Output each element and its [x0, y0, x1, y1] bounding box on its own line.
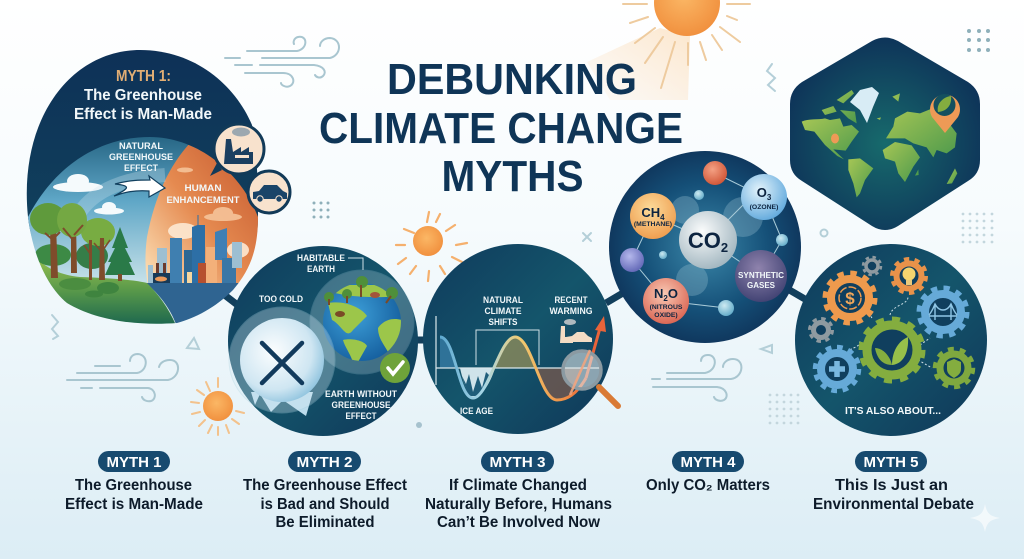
- warming arrow: [586, 328, 600, 378]
- icon: small gray gear top: [863, 257, 881, 275]
- icon: dollar gear: [825, 273, 875, 323]
- title: MYTHS: [442, 152, 584, 201]
- natural sky: [28, 137, 200, 323]
- icon: small pin: [831, 134, 839, 144]
- label: myth 4: [646, 451, 770, 494]
- map: greenland: [850, 87, 879, 123]
- molecule: CO2: [679, 211, 737, 269]
- molecule: small spheres: [620, 161, 788, 316]
- label: myth 1: The Greenhouse: [75, 477, 192, 494]
- chart fills: [440, 337, 455, 368]
- icon: sun at top: [587, 0, 750, 100]
- text: habitable earth: [297, 253, 345, 275]
- icon: habitable earth globe: [310, 270, 414, 374]
- icon: lightbulb gear: [892, 259, 926, 293]
- icon: small dot: [416, 422, 422, 428]
- label: myth 3: MYTH 3: [490, 455, 546, 471]
- text: natural greenhouse effect: GREENHOUSE: [109, 152, 173, 163]
- text: natural climate shifts: [483, 295, 523, 328]
- trees: [30, 203, 135, 298]
- label: myth 5: Environmental Debate: [813, 496, 974, 513]
- text: human enhancement: ENHANCEMENT: [166, 195, 240, 206]
- clouds: [53, 174, 124, 214]
- text: natural greenhouse effect: NATURAL: [119, 141, 163, 152]
- icon: map pin leaf: [930, 94, 960, 133]
- molecule: CH4: 4: [660, 213, 665, 222]
- label: myth 3: If Climate Changed: [449, 477, 587, 494]
- connectors between circles: [222, 288, 810, 340]
- water: [147, 283, 238, 324]
- icon: green check: [380, 353, 410, 383]
- axes: [436, 316, 600, 385]
- text: it's also about: IT'S ALSO ABOUT...: [845, 405, 941, 417]
- icon: factory bubble: [210, 124, 264, 176]
- text: habitable earth: HABITABLE: [297, 253, 345, 264]
- text: earth without greenhouse effect: [325, 389, 397, 422]
- text: human enhancement: [166, 183, 240, 206]
- clouds over city: [168, 168, 249, 258]
- molecule: synthetic gases: GASES: [747, 280, 775, 290]
- molecule: N2O: O: [668, 286, 678, 301]
- label: myth 2: Be Eliminated: [276, 514, 374, 531]
- chart: climate curve: [436, 316, 606, 400]
- text: myth 1 heading: Effect is Man-Made: [74, 106, 212, 123]
- icon: dot grids: [769, 213, 993, 424]
- molecule: O3: 3: [767, 193, 772, 202]
- text: ice age: ICE AGE: [460, 406, 493, 417]
- label: myth 5: MYTH 5: [864, 455, 918, 471]
- leader line: [348, 258, 363, 270]
- scene: nature versus city: [28, 137, 258, 324]
- icon: gray gear left: [810, 318, 832, 342]
- molecule: CO2: CO: [688, 228, 721, 253]
- panel: myth 4 circle: [609, 151, 801, 343]
- panel background blob: [27, 50, 258, 323]
- icon: dots: [312, 29, 990, 218]
- map: continents: [802, 90, 957, 197]
- molecule: O3: (OZONE): [750, 204, 778, 211]
- label: myth 5: [813, 451, 974, 513]
- bond lines: [632, 173, 782, 308]
- label: myth 3: Naturally Before, Humans: [425, 496, 612, 513]
- molecule: O3: O: [757, 185, 767, 200]
- icon: sun lower left: [191, 378, 244, 435]
- dashed links between gears: [845, 297, 932, 368]
- islands: [877, 93, 919, 176]
- molecule: N2O: 2: [663, 294, 668, 303]
- text: natural greenhouse effect: EFFECT: [124, 163, 158, 174]
- arrow: [114, 176, 165, 197]
- molecule: N2O: N: [654, 286, 663, 301]
- icon: shield gear: [935, 349, 973, 387]
- icon: wind lower left: [67, 354, 178, 401]
- text: habitable earth: EARTH: [307, 264, 335, 275]
- molecule: CO2: 2: [721, 240, 728, 255]
- city buildings: [148, 215, 242, 283]
- text: earth without greenhouse effect: EFFECT: [346, 411, 377, 422]
- label: myth 2: [243, 451, 407, 531]
- icon: leaf gear: [861, 319, 923, 381]
- label: myth 2: MYTH 2: [296, 455, 352, 471]
- panel: myth 2 circle: [228, 246, 418, 436]
- icon: wind top left: [225, 37, 339, 87]
- africa: [883, 142, 920, 182]
- label: myth 1: [65, 451, 203, 513]
- circle background: [609, 151, 801, 343]
- pale discs: [671, 196, 763, 296]
- label: myth 2: is Bad and Should: [260, 496, 390, 513]
- molecule: CH4: (METHANE): [634, 221, 672, 228]
- molecule: CH4: CH: [641, 205, 660, 220]
- curve: [440, 337, 586, 400]
- text: natural climate shifts: CLIMATE: [484, 306, 522, 317]
- label: myth 4: Only CO₂ Matters: [646, 477, 770, 494]
- label: myth 4: MYTH 4: [680, 455, 736, 471]
- molecule: N2O: [643, 278, 689, 324]
- panel: myth 5 circle: [795, 244, 987, 436]
- molecule: synthetic gases: SYNTHETIC: [738, 270, 784, 280]
- south america: [848, 158, 873, 197]
- icon: factory and car: [560, 319, 592, 343]
- label: myth 1: MYTH 1: [106, 455, 162, 471]
- text: myth 1 heading: The Greenhouse: [84, 87, 202, 104]
- molecule: N2O: (NITROUS: [650, 304, 683, 311]
- text: natural climate shifts: NATURAL: [483, 295, 523, 306]
- eurasia: [886, 107, 957, 157]
- icon: bridge gear: [919, 288, 967, 336]
- icon: plus gear: [815, 347, 859, 391]
- human enhancement orange side: [146, 144, 258, 285]
- text: recent warming: [550, 295, 592, 317]
- text: myth 1 heading: MYTH 1:: [116, 68, 171, 85]
- bracket: [476, 330, 539, 365]
- text: natural greenhouse effect: [109, 141, 173, 174]
- text: recent warming: WARMING: [550, 306, 592, 317]
- text: earth without greenhouse effect: GREENHOUSE: [332, 400, 390, 411]
- icon: magnifying glass: [563, 350, 618, 406]
- hexagon shape: [790, 38, 980, 230]
- label: myth 3: [425, 451, 612, 531]
- icon: wind lower right: [652, 355, 741, 401]
- circle background: [795, 244, 987, 436]
- icon: small marks: [52, 64, 828, 353]
- molecule: CH4: [630, 193, 676, 239]
- text: too cold: TOO COLD: [259, 294, 303, 305]
- molecule: O3: [741, 174, 787, 220]
- text: earth without greenhouse effect: EARTH WITHOUT: [325, 389, 397, 400]
- arctic islands: [822, 90, 857, 123]
- panel: myth 3 circle: [423, 244, 618, 434]
- panel: myth 1 circle: [20, 50, 290, 330]
- text: myth 1 heading: [74, 68, 212, 123]
- north america: [802, 118, 859, 159]
- title: CLIMATE CHANGE: [319, 104, 683, 153]
- text: natural climate shifts: SHIFTS: [488, 317, 518, 328]
- circle background: [228, 246, 418, 436]
- title: DEBUNKING: [387, 55, 637, 104]
- text: recent warming: RECENT: [554, 295, 588, 306]
- pale swoosh arc: [80, 175, 165, 212]
- text: human enhancement: HUMAN: [184, 183, 222, 194]
- icon: sun middle: [396, 212, 467, 281]
- icon: sparkle: [970, 504, 1000, 532]
- title: [319, 55, 683, 201]
- icon: car bubble: [248, 171, 290, 213]
- label: myth 3: Can’t Be Involved Now: [437, 514, 601, 531]
- green hill: [38, 260, 176, 324]
- icon: frozen earth: [229, 307, 335, 416]
- label: myth 1: Effect is Man-Made: [65, 496, 203, 513]
- icon: dollar gear: $: [845, 289, 855, 308]
- circle background: [423, 244, 613, 434]
- label: myth 5: This Is Just an: [835, 477, 948, 494]
- panel: world map hexagon: [790, 38, 980, 230]
- molecule: N2O: OXIDE): [654, 312, 678, 319]
- australia: [947, 168, 957, 184]
- label: myth 2: The Greenhouse Effect: [243, 477, 407, 494]
- molecule: synthetic gases: [735, 250, 787, 302]
